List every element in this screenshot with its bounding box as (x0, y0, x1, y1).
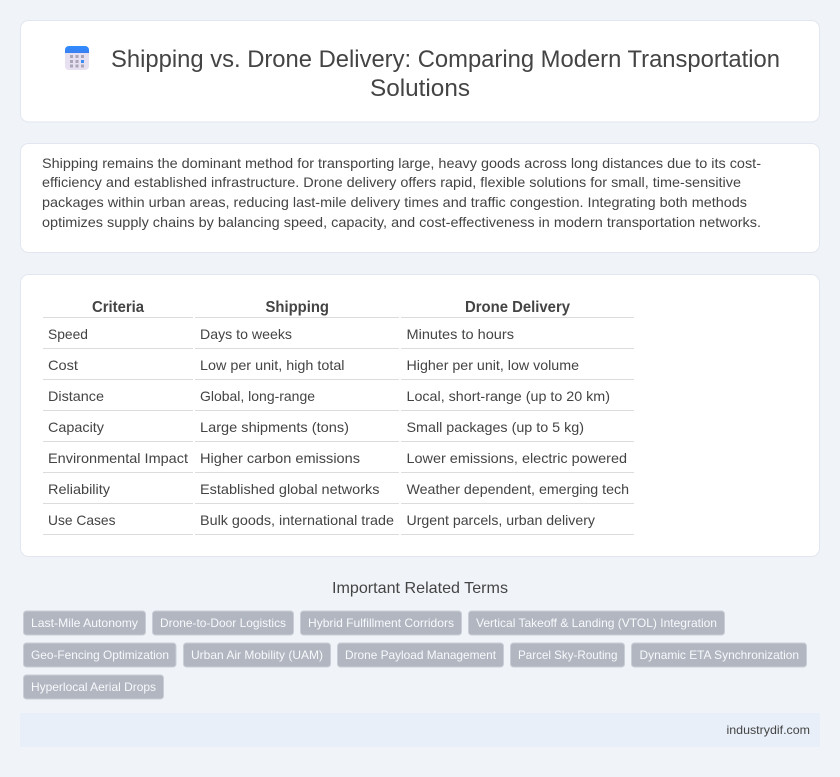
tag (468, 611, 724, 635)
row: environmental impact: Lower emissions, electric powered (406, 450, 627, 466)
row: capacity: Large shipments (tons) (200, 419, 349, 435)
intro paragraph: optimizes supply chains by balancing speed, capacity, and cost-effectiveness in modern transportation networks. (42, 214, 761, 230)
footer (20, 713, 820, 747)
tag: Last-Mile Autonomy (31, 616, 138, 630)
table header (92, 299, 570, 316)
row: reliability: Weather dependent, emerging tech (406, 481, 629, 497)
tag (184, 643, 330, 667)
footer: industrydif.com (726, 723, 810, 737)
tag: Geo-Fencing Optimization (31, 648, 169, 662)
tag: Vertical Takeoff & Landing (VTOL) Integration (476, 616, 717, 630)
intro paragraph: efficiency and established infrastructure. Drone delivery offers rapid, flexible solutions for small, time-sensitive (42, 174, 741, 190)
row: cost (48, 357, 579, 373)
row: reliability (48, 481, 629, 497)
row: speed (48, 326, 514, 342)
row: cost: Low per unit, high total (200, 357, 344, 373)
table header: Drone Delivery (465, 299, 570, 316)
icon: calendar (65, 46, 89, 70)
tag: Urban Air Mobility (UAM) (191, 648, 323, 662)
row: environmental impact (48, 450, 627, 466)
row: environmental impact: Environmental Impact (48, 450, 188, 466)
row: speed: Days to weeks (200, 326, 292, 342)
tag (24, 611, 146, 635)
tag (24, 643, 176, 667)
tag: Drone-to-Door Logistics (160, 616, 286, 630)
tag (24, 675, 164, 699)
intro paragraph: packages within urban areas, reducing last-mile delivery times and traffic congestion. Integrating both methods (42, 194, 747, 210)
tag (510, 643, 624, 667)
panel: intro text (20, 144, 820, 252)
intro paragraph (42, 155, 761, 230)
panel: comparison table (20, 274, 820, 556)
row: environmental impact: Higher carbon emissions (200, 450, 360, 466)
related term tags (24, 611, 806, 699)
tag (152, 611, 294, 635)
row: distance: Distance (48, 388, 104, 404)
tag: Hybrid Fulfillment Corridors (308, 616, 454, 630)
row: distance: Local, short-range (up to 20 km) (406, 388, 610, 404)
row: reliability: Established global networks (200, 481, 380, 497)
panel: header (20, 20, 820, 122)
row: use cases: Bulk goods, international trade (200, 512, 394, 528)
intro paragraph: Shipping remains the dominant method for transporting large, heavy goods across long distances due to its cost- (42, 155, 761, 171)
row: reliability: Reliability (48, 481, 110, 497)
row: speed: Minutes to hours (406, 326, 514, 342)
tag (632, 643, 806, 667)
table header: Shipping (266, 299, 329, 316)
row: use cases: Use Cases (48, 512, 116, 528)
row: speed: Speed (48, 326, 88, 342)
tag: Drone Payload Management (345, 648, 497, 662)
row: cost: Higher per unit, low volume (406, 357, 579, 373)
row: use cases (48, 512, 595, 528)
table header: Criteria (92, 299, 144, 316)
tag: Hyperlocal Aerial Drops (31, 680, 156, 694)
row: capacity: Small packages (up to 5 kg) (406, 419, 584, 435)
row: use cases: Urgent parcels, urban delivery (406, 512, 595, 528)
tag (300, 611, 462, 635)
tag (338, 643, 504, 667)
row: distance (48, 388, 610, 404)
row: cost: Cost (48, 357, 78, 373)
row: capacity (48, 419, 584, 435)
title: Solutions (370, 75, 470, 102)
heading: related terms: Important Related Terms (332, 580, 508, 597)
tag: Parcel Sky-Routing (518, 648, 618, 662)
tag: Dynamic ETA Synchronization (640, 648, 799, 662)
row: distance: Global, long-range (200, 388, 315, 404)
row: capacity: Capacity (48, 419, 104, 435)
title (111, 46, 780, 102)
title: Shipping vs. Drone Delivery: Comparing Modern Transportation (111, 46, 780, 73)
